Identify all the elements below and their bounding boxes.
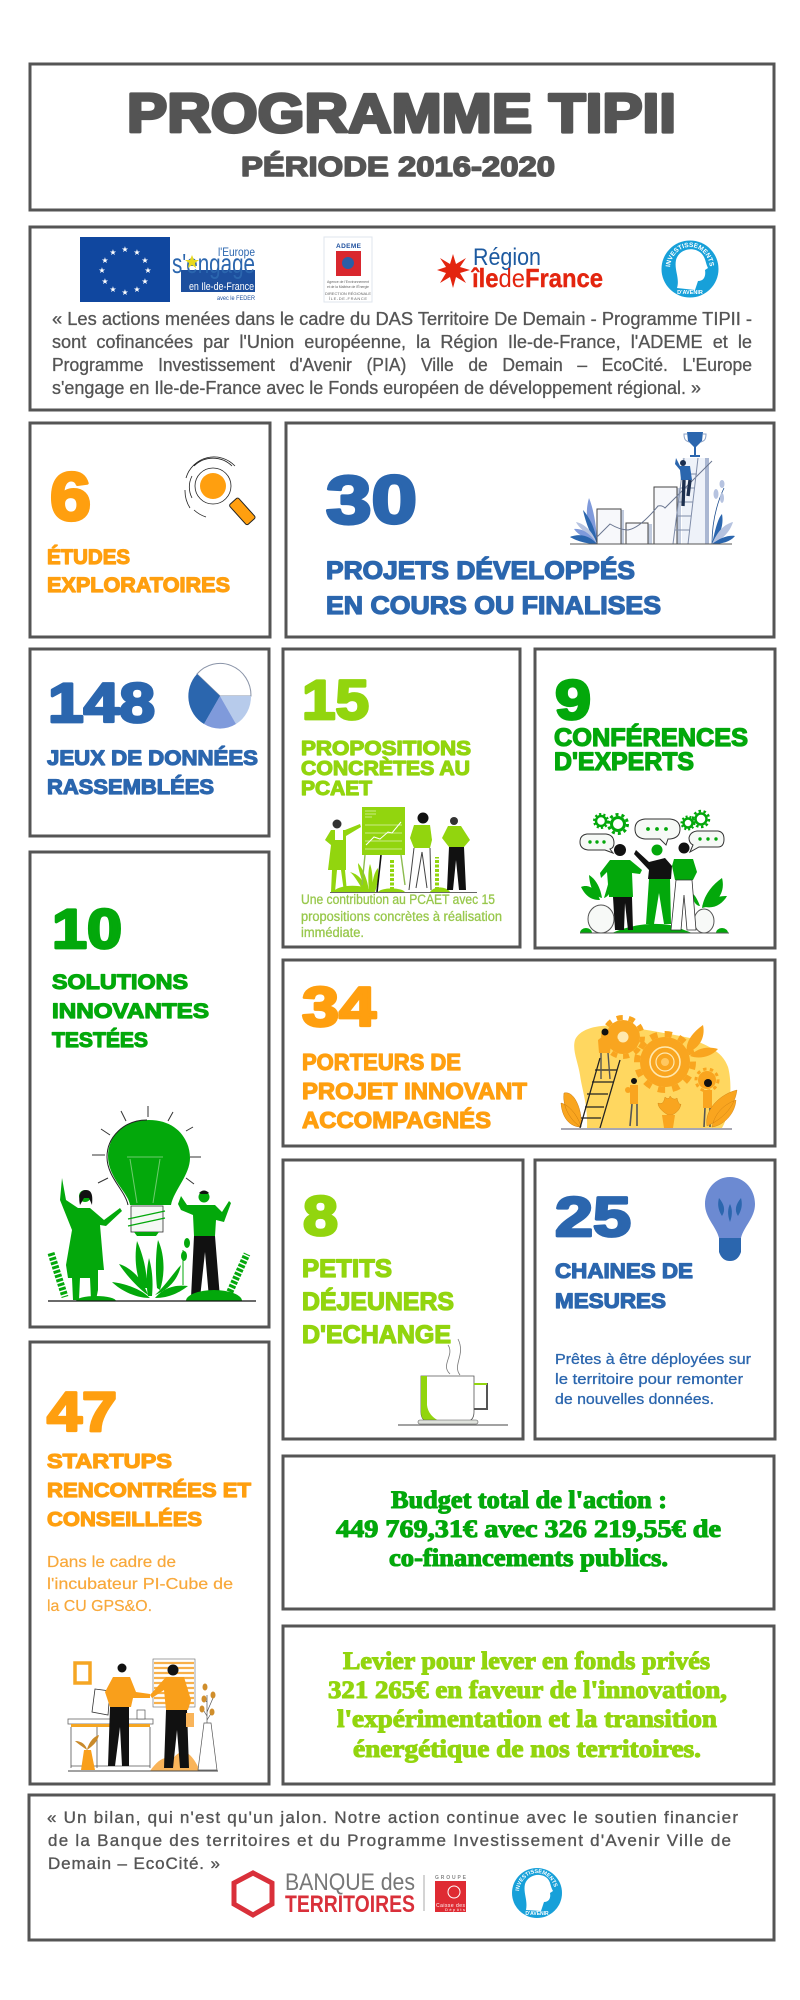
label: PCAET <box>301 778 372 800</box>
label <box>47 546 230 597</box>
label: STARTUPS <box>47 1450 172 1473</box>
label <box>47 747 258 799</box>
logo: Région Île-de-France <box>437 244 603 293</box>
text: conclusion: « Un bilan, qui n'est qu'un jalon. Notre action continue avec le soutien financier <box>47 1808 738 1827</box>
logo: Région Île-de-France: Région <box>473 244 541 271</box>
panel: 15 propositions <box>283 649 520 947</box>
number 15: 15 <box>302 668 369 731</box>
logo: ADEME: Agence de l'Environnement <box>327 280 369 284</box>
text: incubator note: la CU GPS&O. <box>47 1598 152 1615</box>
text: budget: 449 769,31€ avec 326 219,55€ de <box>336 1516 721 1543</box>
panel: 6 études exploratoires <box>30 423 270 637</box>
text: leverage: 321 265€ en faveur de l'innovation, <box>328 1677 727 1704</box>
illustration: growth chart and trophy <box>570 432 735 544</box>
label: INNOVANTES <box>52 1000 209 1023</box>
label: CHAINES DE <box>555 1260 693 1283</box>
logo: Investissements d'Avenir: D'AVENIR <box>677 290 703 296</box>
logo: Banque des Territoires: Dépôts <box>445 1907 465 1912</box>
label: RASSEMBLÉES <box>47 776 214 799</box>
number 8: 8 <box>303 1184 338 1247</box>
logo: European Union flag <box>80 237 170 302</box>
illustration: coffee cup <box>398 1339 508 1425</box>
text: funding statement: s'engage en Ile-de-France avec le Fonds européen de développement régional. » <box>52 378 701 398</box>
panel: 47 startups <box>30 1342 269 1784</box>
label: SOLUTIONS <box>52 971 188 994</box>
number 9: 9 <box>555 668 591 731</box>
text: conclusion: Demain – EcoCité. » <box>48 1854 220 1873</box>
label: CONCRÈTES AU <box>301 757 470 780</box>
panel: funders <box>28 226 776 412</box>
logo: Banque des Territoires: BANQUE des <box>285 1869 415 1896</box>
label: PETITS <box>302 1255 392 1283</box>
panel: 148 jeux de données <box>30 649 269 836</box>
logo: European Union flag: ★ <box>109 248 117 257</box>
text: deployment note: de nouvelles données. <box>555 1391 714 1408</box>
logo: Banque des Territoires: GROUPE <box>435 1875 467 1881</box>
number 10: 10 <box>52 897 122 960</box>
text: budget: co-financements publics. <box>389 1545 668 1572</box>
label: PROPOSITIONS <box>301 738 471 760</box>
chart: pie <box>188 663 251 729</box>
text: conclusion <box>47 1808 738 1873</box>
logo: European Union flag: ★ <box>121 288 129 297</box>
panel: budget <box>283 1456 774 1609</box>
label: TESTÉES <box>52 1029 148 1052</box>
logo: European Union flag: ★ <box>141 256 149 265</box>
icon: magnifying glass <box>185 457 256 525</box>
text: conclusion: de la Banque des territoires et du Programme Investissement d'Avenir Ville de <box>48 1831 731 1850</box>
panel: 9 conférences <box>535 649 775 948</box>
label <box>554 723 748 776</box>
illustration: presentation <box>325 807 477 892</box>
label <box>555 1260 693 1313</box>
label: PROJETS DÉVELOPPÉS <box>326 556 635 585</box>
logo: European Union flag: ★ <box>133 285 141 294</box>
text: incubator note: Dans le cadre de <box>47 1554 176 1571</box>
logo: European Union flag: ★ <box>101 256 109 265</box>
logo: Investissements d'Avenir small: INVESTISSEMENTS <box>515 1869 558 1891</box>
logo: Investissements d'Avenir small: D'AVENIR <box>525 1911 549 1917</box>
text: funding statement <box>52 309 752 398</box>
logo: Banque des Territoires <box>234 1869 467 1918</box>
label: ÉTUDES <box>47 546 130 569</box>
logo: Région Île-de-France: îledeFrance <box>470 263 603 293</box>
logo: Investissements d'Avenir small <box>512 1868 562 1918</box>
logo: Banque des Territoires: Caisse des <box>436 1903 466 1909</box>
text: incubator note <box>47 1554 233 1615</box>
panel: 8 petits déjeuners <box>283 1160 523 1439</box>
logo: ADEME <box>324 237 372 302</box>
label <box>302 1049 527 1133</box>
illustration: gears and team <box>561 1018 737 1129</box>
number 30: 30 <box>326 462 417 538</box>
illustration: handshake in office <box>68 1659 218 1771</box>
text: funding statement: Programme Investissement d'Avenir (PIA) Ville de Demain – EcoCité. L'Europe <box>52 355 752 375</box>
logo: ADEME: DIRECTION RÉGIONALE <box>325 291 371 296</box>
text: leverage: l'expérimentation et la transition <box>337 1706 717 1733</box>
label: CONSEILLÉES <box>47 1508 202 1531</box>
panel: conclusion <box>28 1794 776 1942</box>
logo: European Union flag: ★ <box>109 285 117 294</box>
text: incubator note: l'incubateur PI-Cube de <box>47 1576 233 1593</box>
label <box>47 1450 252 1531</box>
number 148: 148 <box>48 671 155 734</box>
logo: European Union flag: ★ <box>141 277 149 286</box>
logo: Investissements d'Avenir <box>662 240 718 298</box>
panel: 34 porteurs <box>283 960 775 1146</box>
logo: ADEME: et de la Maîtrise de l'Énergie <box>327 284 369 289</box>
panel: 30 projets <box>286 423 774 637</box>
text: budget: Budget total de l'action : <box>391 1487 667 1514</box>
label: PORTEURS DE <box>302 1049 461 1075</box>
label <box>52 971 209 1052</box>
text: budget <box>336 1487 721 1572</box>
subtitle: PÉRIODE 2016-2020 <box>241 151 555 182</box>
text: leverage: Levier pour lever en fonds privés <box>343 1648 710 1675</box>
panel: levier <box>283 1626 774 1784</box>
text: contribution note: immédiate. <box>301 925 364 940</box>
label: JEUX DE DONNÉES <box>47 747 258 770</box>
label: D'EXPERTS <box>554 748 694 776</box>
label <box>301 738 471 800</box>
number 25: 25 <box>555 1185 631 1248</box>
label <box>302 1255 454 1349</box>
logo: European Union flag: ★ <box>133 248 141 257</box>
text: contribution note: propositions concrètes à réalisation <box>301 909 502 924</box>
number 34: 34 <box>302 975 376 1038</box>
text: leverage <box>328 1648 727 1763</box>
logo: Banque des Territoires: TERRITOIRES <box>285 1891 415 1918</box>
logo: l'Europe s'engage: en Ile-de-France <box>189 281 254 293</box>
logo: ADEME: ADEME <box>336 243 362 250</box>
label: EXPLORATOIRES <box>47 574 230 597</box>
text: funding statement: sont cofinancées par l'Union européenne, la Région Ile-de-France, l'ADEME et le <box>52 332 752 352</box>
text: contribution note <box>301 892 502 940</box>
label: MESURES <box>555 1290 666 1313</box>
panel: title <box>30 64 774 210</box>
logo: European Union flag: ★ <box>98 266 106 275</box>
text: contribution note: Une contribution au PCAET avec 15 <box>301 892 495 907</box>
label: DÉJEUNERS <box>302 1287 454 1316</box>
logo: ADEME: ÎLE-DE-FRANCE <box>328 296 367 301</box>
logo: Investissements d'Avenir: INVESTISSEMENTS <box>666 242 714 267</box>
label: ACCOMPAGNÉS <box>302 1106 491 1133</box>
logo: l'Europe s'engage <box>172 245 256 302</box>
logo: European Union flag: ★ <box>144 266 152 275</box>
title: PROGRAMME TIPII <box>127 82 676 144</box>
text: funding statement: « Les actions menées dans le cadre du DAS Territoire De Demain - Programme TIPII - <box>52 309 752 329</box>
logo: European Union flag: ★ <box>101 277 109 286</box>
text: leverage: énergétique de nos territoires. <box>353 1736 701 1763</box>
panel: 10 solutions <box>30 852 269 1327</box>
text: deployment note <box>555 1351 751 1408</box>
label: D'ECHANGE <box>302 1321 451 1349</box>
illustration: light bulb and people <box>48 1106 256 1301</box>
logo: l'Europe s'engage: s'engage <box>172 248 255 279</box>
panel: 25 chaines de mesures <box>535 1160 775 1439</box>
label: EN COURS OU FINALISES <box>326 592 661 620</box>
label: RENCONTRÉES ET <box>47 1479 252 1502</box>
logo: European Union flag: ★ <box>121 245 129 254</box>
number 6: 6 <box>50 459 91 535</box>
label <box>326 556 661 620</box>
label: CONFÉRENCES <box>554 723 748 752</box>
number 47: 47 <box>47 1380 117 1443</box>
label: PROJET INNOVANT <box>302 1078 527 1104</box>
text: deployment note: Prêtes à être déployées sur <box>555 1351 751 1368</box>
text: deployment note: le territoire pour remonter <box>555 1371 743 1388</box>
icon: blue bulb <box>705 1177 755 1261</box>
illustration: experts talking <box>580 811 729 933</box>
logo: l'Europe s'engage: l'Europe <box>218 245 255 259</box>
logo: l'Europe s'engage: avec le FEDER <box>217 296 256 302</box>
